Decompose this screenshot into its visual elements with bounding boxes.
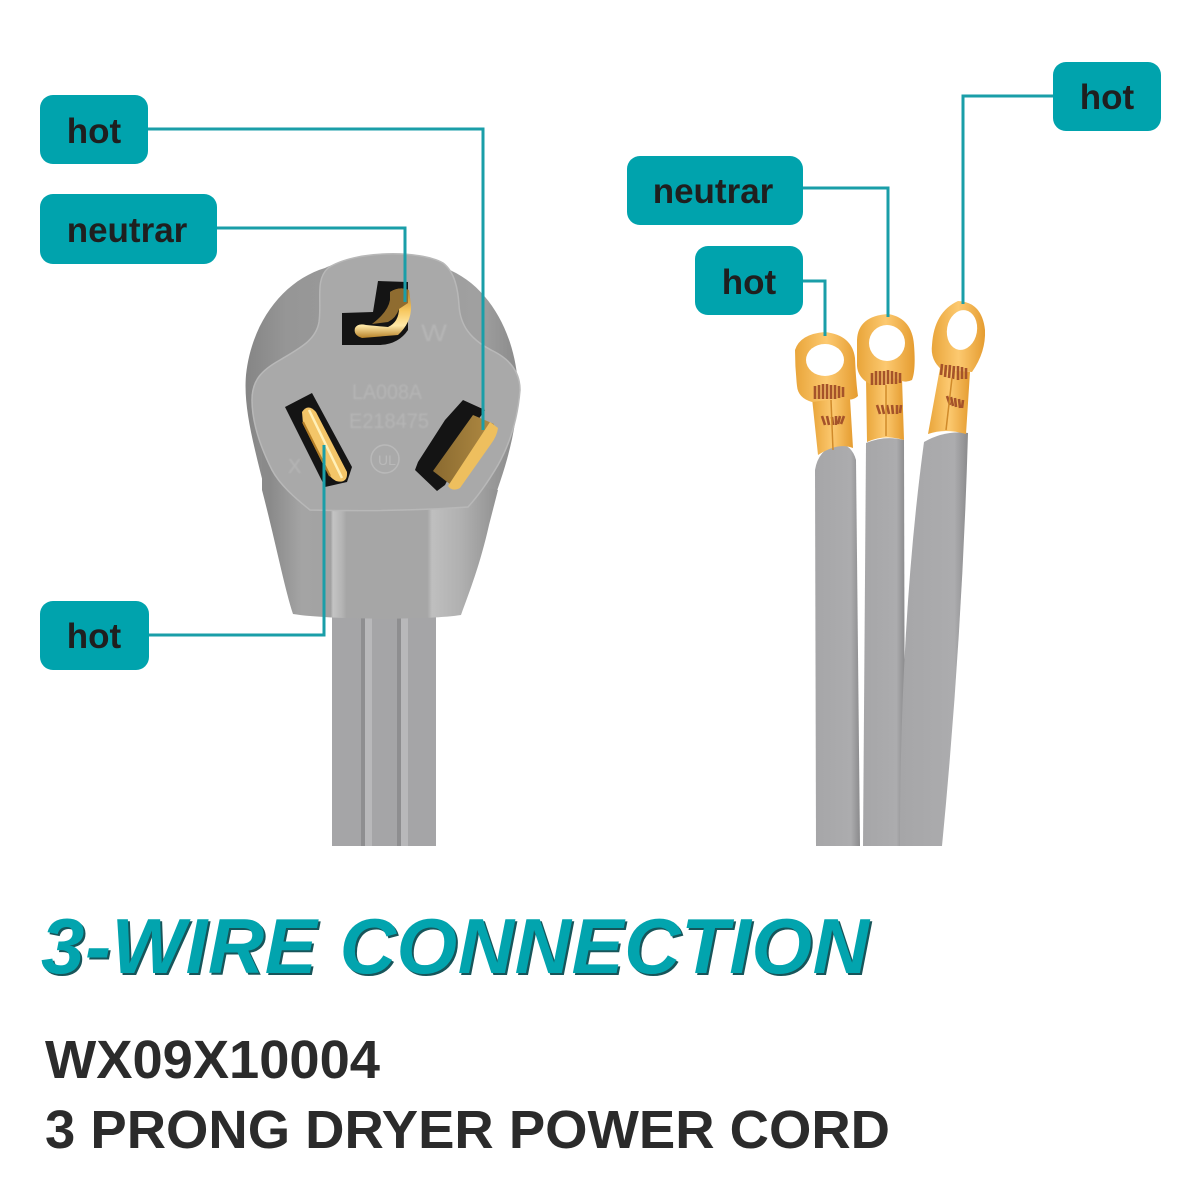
title: 3-WIRE CONNECTION bbox=[41, 902, 871, 990]
label: hot top right: hot bbox=[1080, 78, 1135, 117]
model number: WX09X10004 bbox=[45, 1030, 380, 1090]
separated wires illustration bbox=[795, 301, 985, 846]
label: hot bottom left bbox=[40, 601, 149, 670]
plug and cord illustration bbox=[246, 254, 520, 846]
plug cord bbox=[332, 610, 436, 846]
neutral L-shaped blade bbox=[355, 288, 411, 338]
label: hot bottom left: hot bbox=[67, 617, 122, 656]
embossed marks: LA008A bbox=[352, 381, 422, 404]
right blade bbox=[433, 415, 494, 488]
label: hot top left bbox=[40, 95, 148, 164]
embossed marks bbox=[288, 320, 447, 478]
wire two bbox=[863, 438, 905, 846]
right slot bbox=[415, 400, 485, 491]
plug face bbox=[252, 254, 520, 511]
label: neutrar left: neutrar bbox=[67, 211, 188, 250]
embossed marks: E218475 bbox=[349, 410, 429, 433]
terminal three bbox=[928, 301, 985, 434]
label: hot top left: hot bbox=[67, 112, 122, 151]
label: neutrar right bbox=[627, 156, 803, 225]
UL mark bbox=[371, 445, 399, 473]
label: neutrar left bbox=[40, 194, 217, 264]
plug rear housing bbox=[246, 257, 518, 510]
leader lines bbox=[148, 96, 1053, 635]
embossed marks: W bbox=[421, 320, 447, 347]
title: 3-WIRE CONNECTION bbox=[43, 904, 873, 992]
label: hot top right bbox=[1053, 62, 1161, 131]
terminal two bbox=[857, 314, 915, 442]
plug neck bbox=[262, 450, 498, 619]
label: neutrar right: neutrar bbox=[653, 172, 774, 211]
label: hot lower right: hot bbox=[722, 263, 777, 302]
label: hot lower right bbox=[695, 246, 803, 315]
wire one bbox=[815, 443, 860, 846]
UL mark: UL bbox=[378, 452, 396, 468]
product description: 3 PRONG DRYER POWER CORD bbox=[45, 1100, 890, 1160]
neutral slot bbox=[342, 281, 408, 345]
wire three bbox=[900, 432, 968, 846]
embossed marks: X bbox=[288, 456, 301, 478]
left blade bbox=[302, 408, 347, 482]
terminal one bbox=[795, 332, 858, 455]
left slot bbox=[285, 393, 352, 487]
